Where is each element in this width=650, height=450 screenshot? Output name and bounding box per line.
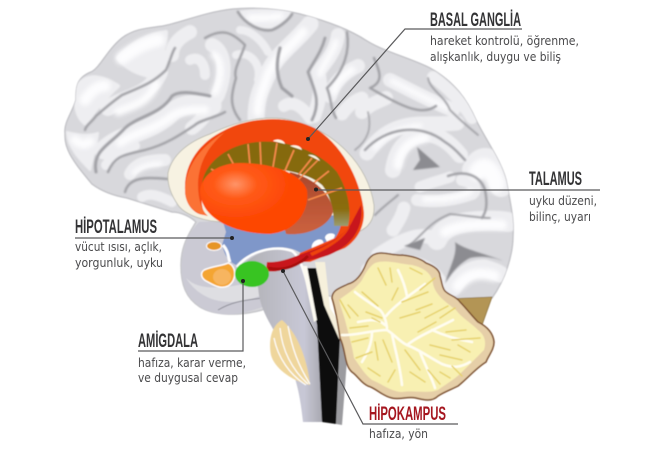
dark sulcus wedges [404,147,503,284]
dark sulci [85,12,490,245]
label: amigdala [138,279,246,385]
blue ventricle [222,215,350,265]
label: hipokampus: hafıza, yön [369,427,428,441]
thalamus [280,172,333,234]
brown cerebellum wedge [445,297,492,325]
brain illustration [65,8,513,425]
label: talamus [314,169,600,224]
caudate olive band [202,140,350,226]
cerebrum cortex [65,8,513,320]
label: hipotalamus: HİPOTALAMUS [75,217,157,238]
pons striations [270,320,310,385]
label: talamus: bilinç, uyarı [529,210,591,224]
leader line: talamus [316,189,600,191]
label: hipotalamus [75,217,234,270]
label: basal ganglia: hareket kontrolü, öğrenme, [430,34,579,48]
basal ganglia C shape [185,119,364,262]
label: talamus: uyku düzeni, [529,194,597,208]
label: amigdala: AMİGDALA [138,331,198,352]
label: amigdala: hafıza, karar verme, [138,356,246,370]
cream capsule [168,118,374,250]
label: basal ganglia: alışkanlık, duygu ve biliş [430,50,561,64]
label: talamus: TALAMUS [529,169,582,190]
grey basal bulge [182,220,300,314]
black stripe and cream fibres [302,262,347,424]
label: hipokampus: HİPOKAMPUS [369,404,446,425]
label: basal ganglia [306,10,579,141]
leader line: hipotalamus [75,237,232,239]
label: amigdala: ve duygusal cevap [138,371,238,385]
yellow veins [340,268,480,384]
label: hipokampus [281,269,458,441]
amygdala [235,261,269,287]
dark red fornix tail [266,205,362,272]
hypothalamus orange nuclei [202,242,235,287]
gyri body [67,11,508,288]
leader line: basal ganglia [308,29,522,139]
brainstem [237,249,347,425]
cerebellar lobes [339,261,485,392]
hippocampus cerebellum body [332,253,494,400]
label: hipotalamus: yorgunluk, uyku [75,256,163,270]
leader line: hipokampus [283,271,458,424]
label: basal ganglia: BASAL GANGLİA [430,10,521,31]
lentiform nucleus [200,163,307,234]
label: hipotalamus: vücut ısısı, açlık, [75,240,162,254]
soft highlights [75,16,502,286]
white matter tree [342,270,472,388]
leader line: amigdala [138,281,243,351]
